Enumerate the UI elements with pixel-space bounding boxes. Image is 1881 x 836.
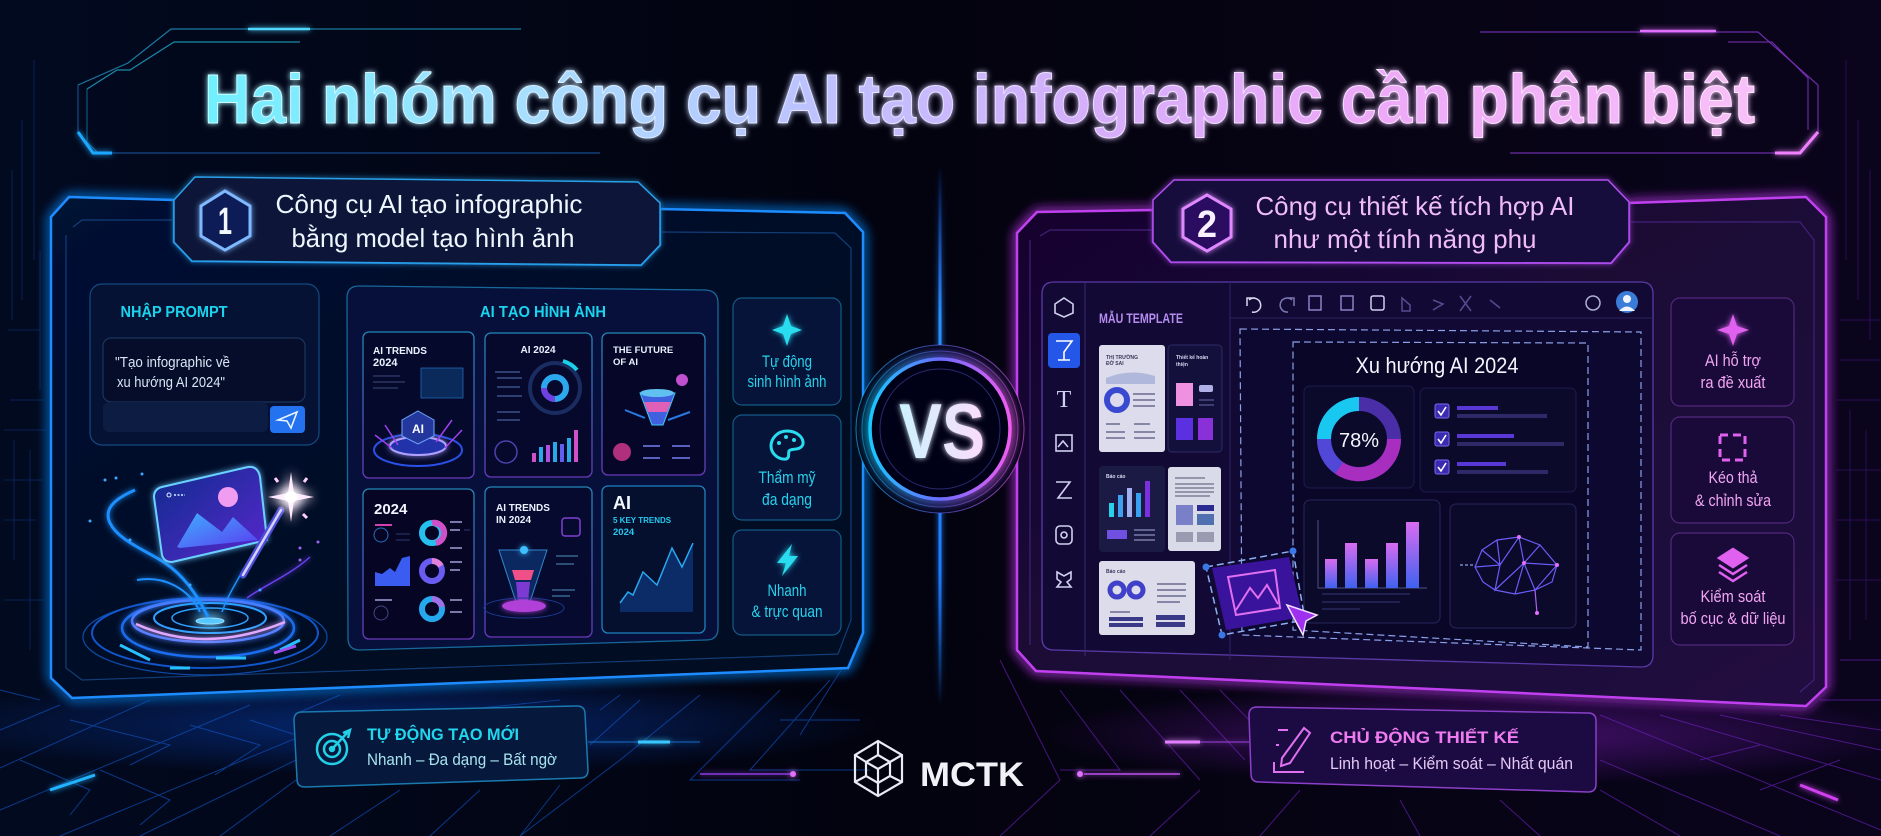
- feature card: automatic images: Tự động: [762, 353, 812, 371]
- thumbnail: AI trends in 2024: AI TRENDS: [496, 503, 550, 514]
- checklist card: [1420, 388, 1576, 492]
- title: Hai nhóm công cụ AI tạo infographic cần phân biệt: [204, 60, 1755, 138]
- thumbnail: AI trends 2024: [363, 332, 474, 478]
- template thumbnail a: THỊ TRƯỜNG: [1106, 353, 1138, 361]
- editor sidebar: [1048, 282, 1085, 656]
- number hexagon: [201, 191, 250, 250]
- inner frame: [1030, 222, 1814, 692]
- thumbnail: The future of AI: OF AI: [613, 357, 638, 368]
- VS emblem: VS: [899, 387, 985, 475]
- template thumbnail a: [1099, 345, 1165, 452]
- prompt heading: NHẬP PROMPT: [120, 302, 228, 321]
- donut chart card: 78%: [1339, 430, 1379, 452]
- results heading: AI TẠO HÌNH ẢNH: [480, 302, 606, 321]
- callout: automatic creation: TỰ ĐỘNG TẠO MỚI: [367, 725, 519, 744]
- template thumbnail b: Thiết kế hoàn: [1176, 354, 1208, 361]
- template thumbnail c: Báo cáo: [1106, 474, 1125, 480]
- panel: left tool group: [51, 177, 863, 698]
- panel: right tool group: [294, 180, 1826, 796]
- number hexagon: 1: [218, 201, 232, 243]
- generated results card: [347, 286, 718, 650]
- editor toolbar: [1230, 296, 1653, 318]
- feature card: diverse aesthetics: [733, 415, 841, 520]
- feature card: drag and drop: [1671, 417, 1794, 523]
- feature card: layout control: [1671, 533, 1794, 645]
- feature card: layout control: Kiểm soát: [1700, 588, 1766, 606]
- illustration: AI image generation: [83, 467, 327, 675]
- template panel: [1099, 282, 1230, 660]
- prompt lower bar: [103, 402, 268, 432]
- template panel: MẪU TEMPLATE: [1099, 310, 1183, 326]
- callout: active design: CHỦ ĐỘNG THIẾT KẾ: [1330, 728, 1519, 747]
- title frame: left bracket: [78, 29, 600, 153]
- icon: cursor: [1287, 605, 1317, 635]
- energy swirls: [108, 490, 310, 617]
- feature card: fast and visual: & trực quan: [752, 603, 822, 621]
- donut chart card: [1304, 386, 1414, 488]
- icon: target: [317, 730, 350, 764]
- callout: active design: Linh hoạt – Kiểm soát – Nhất quán: [1330, 755, 1573, 773]
- header text: Công cụ AI tạo infographic: [276, 189, 582, 219]
- feature card: fast and visual: [733, 530, 841, 635]
- icon: sparkle: [1717, 314, 1749, 346]
- callout: automatic creation: [294, 706, 588, 787]
- particles: [88, 472, 320, 592]
- canvas outer dashed frame: [1240, 329, 1641, 650]
- thumbnail: AI 2024: [485, 333, 592, 477]
- header text: Công cụ thiết kế tích hợp AI: [1256, 191, 1574, 221]
- image card: [154, 467, 267, 562]
- template thumbnail a: ĐỜ SAI: [1106, 359, 1124, 367]
- panel frame: [51, 197, 863, 698]
- panel frame: [1017, 197, 1826, 706]
- feature card: diverse aesthetics: Thẩm mỹ: [758, 469, 816, 487]
- icon: layers: [1719, 549, 1747, 581]
- neural brain card: [1450, 504, 1576, 628]
- center divider line: [938, 165, 942, 705]
- template thumbnail b: thiện: [1176, 362, 1188, 368]
- user avatar: [1616, 291, 1638, 313]
- feature card: drag and drop: & chỉnh sửa: [1695, 492, 1772, 510]
- floor circuit: right: [1000, 660, 1881, 836]
- callout: active design: [1249, 707, 1596, 792]
- magic wand: [243, 472, 314, 575]
- header badge: [1153, 180, 1629, 263]
- thumbnail: AI trends 2024: AI: [412, 422, 424, 436]
- icon: dashed square: [1720, 435, 1745, 460]
- prompt card: xu hướng AI 2024": [117, 374, 225, 391]
- title frame: right bracket: [1480, 31, 1818, 153]
- send button: [270, 406, 305, 433]
- logo mark: [855, 741, 902, 796]
- logo: MCTK: MCTK: [920, 756, 1024, 794]
- floor glow streaks: [50, 742, 1838, 800]
- design editor window: [1042, 282, 1653, 667]
- thumbnail: 2024 donuts: [363, 489, 474, 639]
- inner frame: [66, 220, 851, 680]
- VS emblem: [856, 345, 1024, 513]
- text tool icon: T: [1057, 387, 1072, 413]
- number hexagon: 2: [1197, 204, 1217, 246]
- prompt card: [90, 284, 319, 445]
- icon: palette: [771, 431, 803, 459]
- feature card: layout control: bố cục & dữ liệu: [1680, 610, 1786, 628]
- dragged image element: [1202, 548, 1317, 638]
- holographic platform: [83, 598, 327, 675]
- feature card: AI suggestions: ra đề xuất: [1700, 374, 1766, 392]
- thumbnail: The future of AI: THE FUTURE: [613, 345, 673, 356]
- floor circuit: left: [0, 640, 870, 836]
- template thumbnail e: Báo cáo: [1106, 569, 1125, 575]
- thumbnail: AI key trends: [602, 486, 705, 633]
- number hexagon: [1183, 195, 1231, 251]
- thumbnail: AI trends in 2024: IN 2024: [496, 515, 531, 526]
- feature card: drag and drop: Kéo thả: [1708, 469, 1758, 487]
- feature card: AI suggestions: AI hỗ trợ: [1705, 351, 1761, 370]
- icon: sparkle: [772, 314, 802, 346]
- callout: automatic creation: Nhanh – Đa dạng – Bất ngờ: [367, 751, 557, 769]
- template thumbnail c: [1099, 466, 1165, 552]
- bar chart card: [1304, 500, 1440, 623]
- template thumbnail b: [1168, 345, 1222, 452]
- header badge: như một tính năng phụ: [1274, 224, 1536, 254]
- thumbnail: AI key trends: AI: [613, 493, 631, 513]
- header badge: [174, 177, 660, 265]
- template thumbnail d: [1168, 467, 1221, 551]
- thumbnail: AI trends 2024: 2024: [373, 357, 398, 369]
- thumbnail: AI 2024: AI 2024: [520, 345, 556, 356]
- feature card: diverse aesthetics: đa dạng: [762, 491, 812, 509]
- thumbnail: 2024 donuts: 2024: [374, 501, 408, 518]
- feature card: AI suggestions: [1671, 298, 1794, 406]
- prompt input: [103, 338, 305, 402]
- logo: MCTK: [855, 741, 1024, 796]
- template thumbnail e: [1099, 561, 1195, 635]
- feature card: fast and visual: Nhanh: [768, 582, 806, 600]
- thumbnail: AI trends in 2024: [484, 487, 592, 637]
- icon: pencil: [1274, 728, 1310, 772]
- infographic artboard: [1293, 342, 1588, 647]
- artboard heading: Xu hướng AI 2024: [1356, 353, 1518, 378]
- feature card: automatic images: [733, 298, 841, 405]
- thumbnail: AI key trends: 2024: [613, 527, 635, 538]
- thumbnail: The future of AI: [602, 333, 705, 475]
- feature card: automatic images: sinh hình ảnh: [748, 373, 826, 391]
- prompt card: "Tạo infographic về: [115, 354, 230, 371]
- thumbnail: AI key trends: 5 KEY TRENDS: [613, 516, 672, 525]
- header badge: bằng model tạo hình ảnh: [292, 223, 574, 253]
- thumbnail: AI trends 2024: AI TRENDS: [373, 346, 427, 357]
- icon: lightning bolt: [777, 544, 798, 576]
